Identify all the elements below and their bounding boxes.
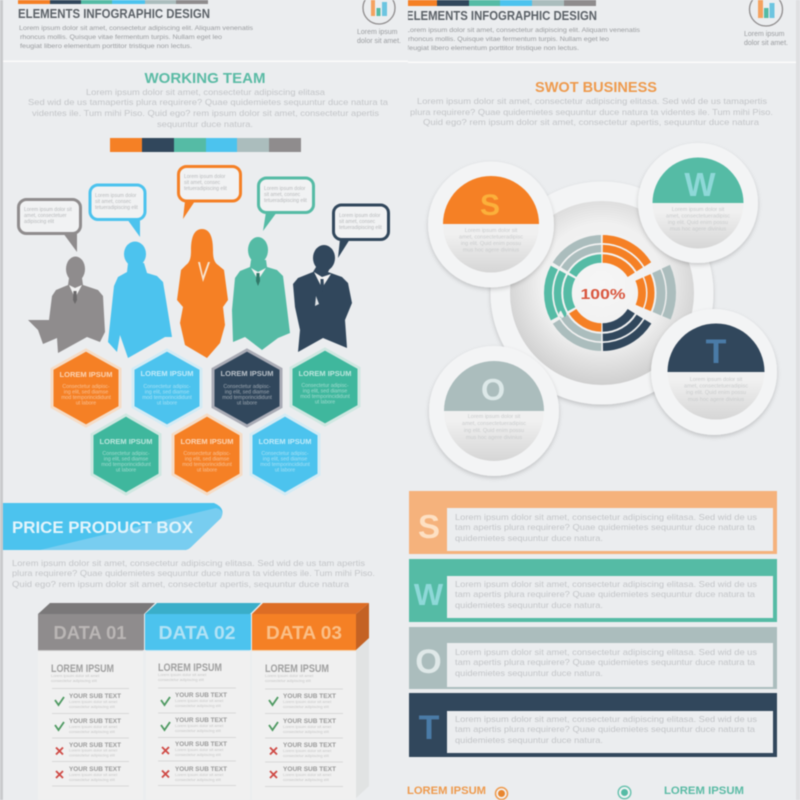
feature list: consectetur adipiscing elit — [175, 728, 222, 733]
hexagon: teal 1 — [291, 349, 359, 425]
hexagon: blue 2: Consectetur adipisc- — [261, 451, 309, 457]
icon: bar chart circle — [750, 0, 782, 26]
donut chart — [524, 209, 692, 377]
speech bubble: blue: Lorem ipsum dolor — [95, 193, 137, 199]
feature list: consectetur adipiscing elit — [69, 704, 116, 709]
hexagon: teal 1: ing elit, sed diamse — [303, 388, 347, 394]
hexagon: teal 2: ut labore — [116, 468, 136, 474]
feature list: Lorem ipsum dolor sit amet — [283, 748, 332, 753]
panel: swot business — [407, 79, 777, 800]
bottom label: orange — [407, 785, 508, 800]
hexagon: orange 1 — [52, 350, 120, 426]
intro paragraph: Lorem ipsum dolor sit amet, consectetur adipiscing elitasa — [86, 87, 325, 97]
header description: rhoncus mollis. Quisque vitae fermentum turpis. Nullam eget leo — [20, 34, 222, 41]
data 03 header — [252, 603, 369, 650]
header description — [19, 25, 254, 50]
hexagon: blue 2: mod temporincididunt — [260, 462, 310, 468]
circle: O — [429, 346, 559, 476]
circle: O: amet, consectetueradipisc — [462, 421, 526, 427]
swot row: T — [409, 693, 777, 757]
column: data 01 — [38, 603, 155, 800]
feature list: YOUR SUB TEXT — [283, 693, 336, 700]
circle: W: mus hoc agere divinius — [670, 226, 726, 232]
header description: rhoncus mollis. Quisque vitae fermentum turpis. Nullam eget leo — [408, 36, 609, 43]
feature list: YOUR SUB TEXT — [283, 718, 336, 725]
feature list: Lorem ipsum dolor sit amet — [175, 772, 224, 777]
column side panel — [356, 638, 369, 798]
hexagon: orange 2 — [173, 415, 241, 494]
price paragraph: Lorem ipsum dolor sit amet, consectetur adipiscing elitasa. Sed wid de us tam apertis — [12, 558, 365, 568]
feature list: Lorem ipsum dolor sit amet — [69, 724, 118, 729]
speech bubble: teal: Lorem ipsum dolor — [264, 186, 306, 192]
header title: ELEMENTS INFOGRAPHIC DESIGN — [406, 8, 597, 23]
banner: PRICE PRODUCT BOX — [12, 518, 194, 537]
feature list: consectetur adipiscing elit — [283, 704, 330, 709]
speech bubble: blue — [90, 185, 145, 237]
circle: O: Lorem ipsum dolor sit — [468, 414, 521, 420]
circle: O: ing elit. Quid enim possu — [464, 428, 524, 434]
circle: T — [651, 309, 777, 435]
hexagon: orange 1: Consectetur adipisc- — [62, 384, 110, 390]
feature list: Lorem ipsum dolor sit amet — [69, 748, 118, 752]
feature list: consectetur adipiscing elit — [283, 753, 330, 758]
feature list: consectetur adipiscing elit — [175, 777, 222, 782]
donut label: 100% — [580, 286, 626, 303]
header description: Lorem ipsum dolor sit amet, consectetur adipiscing elit. Aliquam venenatis — [406, 27, 641, 34]
circle: S — [428, 162, 554, 288]
circle: O: mus hoc agere divinius — [466, 435, 522, 441]
hexagon: teal 2: ing elit, sed diamse — [104, 456, 148, 462]
price paragraph: plura requirere? Quae quidemietes sequuntur duce natura ta videntes ile. Tum mihi Piso. — [12, 568, 375, 578]
hexagon: orange 1: ing elit, sed diamse — [64, 390, 108, 396]
hexagon: blue 2: ing elit, sed diamse — [263, 456, 307, 462]
heading: swot business: SWOT BUSINESS — [535, 79, 657, 96]
feature list — [52, 688, 129, 786]
swot paragraph: Quid ego? rem ipsum dolor sit amet, consectetur apertis, sequuntur duce natura — [423, 117, 759, 127]
intro paragraph — [28, 87, 388, 129]
hexagon: navy: ing elit, sed diamse — [225, 390, 269, 396]
column: data 02: consectetur adipiscing elit — [158, 677, 205, 682]
circle: S: Lorem ipsum dolor sit — [465, 228, 518, 234]
speech bubble: navy: sit amet, consec — [339, 219, 376, 225]
swot row: W: tam apertis plura requirere? Quae quidemietes sequuntur duce natura ta — [455, 589, 755, 599]
feature list: YOUR SUB TEXT — [69, 742, 121, 749]
feature list: consectetur adipiscing elit — [69, 729, 116, 734]
swot row: T: tam apertis plura requirere? Quae quidemietes sequuntur duce natura ta — [455, 724, 755, 734]
column: data 01: LOREM IPSUM — [51, 663, 114, 675]
swot row: T: T — [419, 709, 440, 747]
feature list: YOUR SUB TEXT — [175, 766, 227, 773]
header description: feugiat libero elementum porttitor tristique non lectus. — [20, 43, 192, 50]
swot paragraph: plura requirere? Quae quidemietes sequuntur duce natura ta videntes ile. Tum mihi Piso. — [410, 107, 773, 117]
data 02 header — [145, 603, 261, 650]
banner — [3, 503, 222, 550]
bottom label: teal — [618, 785, 744, 799]
header description: Lorem ipsum dolor sit amet, consectetur adipiscing elit. Aliquam venenatis — [19, 25, 254, 32]
hexagon: teal 2: Consectetur adipisc- — [102, 451, 150, 457]
speech bubble: orange: Lorem ipsum dolor — [184, 174, 226, 180]
column: data 03: Lorem ipsum dolor sit amet — [265, 673, 314, 678]
sector: top right — [547, 238, 657, 348]
intro paragraph: videntes ile. Tum mihi Piso. Quid ego? rem ipsum dolor sit amet, consectetur apertis — [32, 108, 379, 118]
sector: bottom right — [528, 219, 676, 367]
circle: S: S — [480, 189, 500, 222]
person: teal — [232, 237, 290, 350]
feature list — [158, 688, 236, 786]
header title: ELEMENTS INFOGRAPHIC DESIGN — [18, 6, 210, 21]
hexagon: orange 1: LOREM IPSUM — [60, 370, 112, 379]
hexagon: teal 2 — [92, 415, 160, 494]
speech bubble: blue: tetueradipiscing elit — [95, 205, 138, 211]
speech bubble: grey — [18, 200, 80, 252]
speech bubble: navy: Lorem ipsum dolor — [339, 213, 381, 219]
hexagon: orange 2: ut labore — [197, 468, 217, 474]
icon caption — [357, 29, 401, 45]
hexagon: blue 1: mod temporincididunt — [142, 395, 192, 401]
swot row: S: tam apertis plura requirere? Quae quidemietes sequuntur duce natura ta — [455, 522, 755, 532]
hexagon: orange 1: mod temporincididunt — [61, 395, 111, 401]
feature list: Lorem ipsum dolor sit amet — [283, 699, 332, 704]
column: data 02: Lorem ipsum dolor sit amet — [158, 672, 207, 677]
hexagon: navy: mod temporincididunt — [222, 395, 272, 401]
hexagon: teal 2: LOREM IPSUM — [100, 437, 152, 446]
speech bubble: navy: tetueradipiscing elit — [339, 225, 382, 231]
swot row: S: Lorem ipsum dolor sit amet, consectetur adipiscing elitasa. Sed wid de us — [455, 512, 757, 522]
icon caption: Lorem ipsum — [744, 31, 785, 38]
hexagon: teal 1: mod temporincididunt — [300, 394, 350, 400]
header description — [406, 27, 641, 52]
circle: O: O — [481, 372, 505, 407]
feature list: consectetur adipiscing elit — [69, 752, 116, 758]
header description: feugiat libero elementum porttitor tristique non lectus. — [407, 45, 579, 52]
hexagon: blue 2: LOREM IPSUM — [259, 437, 311, 446]
hexagon: orange 1: ut labore — [76, 400, 96, 406]
feature list: YOUR SUB TEXT — [69, 718, 121, 725]
feature list: consectetur adipiscing elit — [283, 777, 330, 782]
circle: W — [638, 143, 758, 263]
feature list: YOUR SUB TEXT — [175, 717, 227, 724]
icon caption: dolor sit amet. — [744, 40, 788, 47]
circle: T: amet, consectetueradipisc — [684, 384, 748, 390]
speech bubble: navy — [334, 205, 388, 258]
heading: working team: WORKING TEAM — [144, 70, 266, 87]
person: blue — [108, 242, 172, 358]
swot row: S: quidemietes sequuntur duce natura. — [455, 533, 603, 543]
feature list: YOUR SUB TEXT — [175, 692, 227, 699]
speech bubble: teal — [258, 178, 314, 231]
column: data 01: Lorem ipsum dolor sit amet — [51, 673, 100, 678]
circle: W: W — [684, 166, 716, 203]
bottom label: teal: LOREM IPSUM — [664, 785, 744, 797]
swot row: O: quidemietes sequuntur duce natura. — [455, 668, 603, 678]
column: data 02 — [145, 603, 261, 800]
swot row: W: W — [414, 577, 444, 612]
hexagon: blue 1 — [133, 350, 201, 426]
hexagon: orange 2: Consectetur adipisc- — [183, 451, 231, 457]
speech bubble: orange: sit amet, consec — [184, 180, 221, 186]
swot row: W: quidemietes sequuntur duce natura. — [455, 600, 603, 610]
icon: bar chart circle — [363, 0, 395, 24]
swot row: S: S — [418, 508, 440, 545]
hexagon: blue 1: Consectetur adipisc- — [143, 384, 191, 390]
circle: S: amet, consectetueradipisc — [459, 234, 523, 240]
feature list: YOUR SUB TEXT — [175, 741, 227, 748]
hexagon: blue 1: LOREM IPSUM — [141, 369, 193, 378]
circle: W: amet, consectetueradipisc — [666, 214, 730, 220]
hexagon: blue 2 — [251, 415, 319, 494]
sector: bottom left — [547, 238, 657, 348]
speech bubble: grey: amet, consectetuer — [24, 213, 67, 219]
intro paragraph: Sed wid de us tamapertis plura requirere? Quae quidemietes sequuntur duce natura ta — [28, 97, 388, 107]
icon caption — [744, 31, 788, 47]
hexagon: navy: ut labore — [237, 400, 257, 406]
swot row: T: Lorem ipsum dolor sit amet, consectetur adipiscing elitasa. Sed wid de us — [455, 714, 757, 724]
speech bubble: teal: sit amet, consec — [264, 192, 301, 198]
feature list — [265, 689, 343, 786]
hexagon: navy: Consectetur adipisc- — [223, 384, 271, 390]
hexagon: orange 2: ing elit, sed diamse — [185, 456, 229, 462]
colour strip — [408, 0, 596, 6]
circle: T: ing elit. Quid enim possu — [686, 390, 746, 396]
swot row: W — [409, 559, 777, 622]
column: data 03: LOREM IPSUM — [265, 663, 329, 675]
feature list: YOUR SUB TEXT — [69, 693, 121, 700]
feature list: consectetur adipiscing elit — [283, 729, 330, 734]
circle: W: Lorem ipsum dolor sit — [672, 207, 725, 213]
hexagon: teal 1: ut labore — [315, 400, 335, 406]
hexagon: orange 2: LOREM IPSUM — [181, 437, 233, 446]
circle: S: ing elit. Quid enim possu — [461, 241, 521, 247]
sector: right — [524, 209, 692, 377]
column: data 03 — [252, 603, 369, 800]
person: navy — [293, 245, 352, 352]
header: right — [406, 0, 788, 52]
feature list: Lorem ipsum dolor sit amet — [175, 723, 224, 728]
icon caption: Lorem ipsum — [357, 29, 398, 36]
hexagon: blue 1: ut labore — [157, 400, 177, 406]
data 02 header: DATA 02 — [158, 623, 236, 643]
hexagon: blue 2: ut labore — [275, 468, 295, 474]
feature list: consectetur adipiscing elit — [69, 777, 116, 782]
hexagon: orange 2: mod temporincididunt — [182, 462, 232, 468]
panel: price product box — [3, 503, 375, 800]
hexagon: teal 1: Consectetur adipisc- — [301, 383, 349, 389]
swot row: O: Lorem ipsum dolor sit amet, consectetur adipiscing elitasa. Sed wid de us — [455, 647, 757, 657]
price paragraph — [12, 558, 375, 589]
data 01 header: DATA 01 — [54, 623, 126, 643]
speech bubble: teal: tetueradipiscing elit — [264, 198, 307, 204]
feature list: Lorem ipsum dolor sit amet — [69, 699, 118, 704]
circle: T: T — [706, 333, 727, 371]
column: data 03: consectetur adipiscing elit — [265, 678, 312, 683]
header: left — [18, 0, 401, 50]
sector: left — [529, 220, 675, 366]
column: data 01: consectetur adipiscing elit — [51, 678, 98, 683]
speech bubble: blue: sit amet, consec — [95, 199, 132, 205]
swot row: O: tam apertis plura requirere? Quae quidemietes sequuntur duce natura ta — [455, 657, 755, 667]
hexagon: teal 1: LOREM IPSUM — [299, 369, 351, 378]
icon caption: dolor sit amet. — [357, 38, 401, 45]
speech bubble: grey: Lorem ipsum dolor sit — [24, 207, 72, 213]
feature list: Lorem ipsum dolor sit amet — [175, 698, 224, 703]
data 01 header — [38, 603, 155, 650]
price paragraph: Quid ego? rem ipsum dolor sit amet, consectetur apertis, sequuntur duce natura — [12, 579, 349, 589]
feature list: consectetur adipiscing elit — [175, 752, 222, 757]
swot paragraph — [410, 96, 773, 127]
feature list: YOUR SUB TEXT — [69, 766, 121, 773]
swot row: O — [409, 627, 777, 689]
feature list: YOUR SUB TEXT — [283, 766, 336, 773]
feature list: Lorem ipsum dolor sit amet — [283, 724, 332, 729]
feature list: Lorem ipsum dolor sit amet — [175, 747, 224, 752]
feature list: YOUR SUB TEXT — [283, 742, 336, 749]
swot row: W: Lorem ipsum dolor sit amet, consectetur adipiscing elitasa. Sed wid de us — [455, 579, 757, 589]
person: grey — [28, 256, 105, 353]
feature list: Lorem ipsum dolor sit amet — [69, 772, 118, 777]
colour strip — [110, 138, 301, 152]
hexagon: navy — [213, 350, 281, 426]
swot row: S — [409, 491, 777, 554]
swot row: O: O — [415, 643, 442, 681]
speech bubble: orange — [178, 166, 240, 219]
panel: working team — [18, 70, 388, 494]
colour strip — [18, 0, 208, 4]
feature list: consectetur adipiscing elit — [175, 703, 222, 708]
circle: W: ing elit. Quid enim possu — [668, 220, 728, 226]
column: data 02: LOREM IPSUM — [158, 662, 222, 674]
speech bubble: orange: tetueradipiscing elit — [184, 186, 227, 192]
hexagon: blue 1: ing elit, sed diamse — [145, 390, 189, 396]
data 03 header: DATA 03 — [266, 623, 342, 643]
sector: top left — [528, 219, 676, 367]
bottom label: orange: LOREM IPSUM — [407, 785, 486, 797]
circle: T: Lorem ipsum dolor sit — [690, 377, 743, 383]
circle: S: mus hoc agere divinius — [463, 248, 519, 254]
swot row: T: quidemietes sequuntur duce natura. — [455, 735, 603, 745]
intro paragraph: sequuntur duce natura. — [157, 119, 253, 129]
hexagon: navy: LOREM IPSUM — [221, 369, 273, 378]
hexagon: teal 2: mod temporincididunt — [101, 462, 151, 468]
circle: T: mus hoc agere divinius — [688, 397, 744, 403]
central disc — [490, 182, 714, 404]
swot paragraph: Lorem ipsum dolor sit amet, consectetur adipiscing elitasa. Sed wid de us tamapertis — [417, 96, 767, 106]
person: orange — [177, 229, 228, 358]
speech bubble: grey: adipiscing elit — [24, 219, 55, 225]
feature list: Lorem ipsum dolor sit amet — [283, 772, 332, 777]
